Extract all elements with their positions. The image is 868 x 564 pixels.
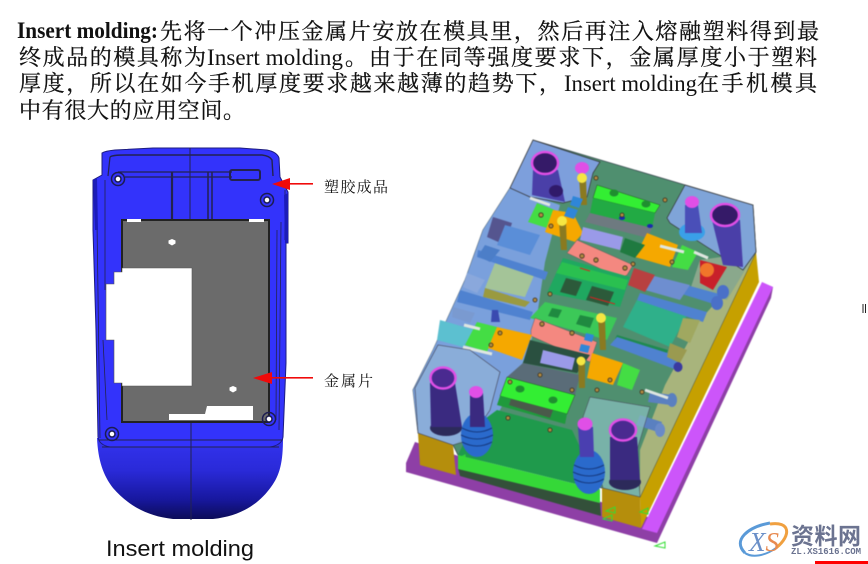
- watermark logo: [740, 523, 861, 557]
- pale right-side block: [690, 252, 756, 300]
- intro text block: 由于在同等强度要求下，金属厚度小于塑料: [369, 45, 817, 71]
- pink plate upper: [567, 240, 633, 278]
- housing detail lines: [97, 148, 285, 520]
- inserts, lower: [465, 322, 640, 395]
- intro text block: Insert molding: [564, 71, 697, 96]
- center green cavity: [530, 258, 630, 340]
- plate top tabs: [127, 219, 264, 222]
- plate holes: [168, 239, 236, 392]
- pin back right: [679, 196, 705, 241]
- heading term: Insert molding:: [17, 18, 158, 43]
- lower green core: [458, 410, 600, 490]
- red axis marks: [580, 268, 615, 304]
- intro text block: [17, 18, 819, 123]
- intro text block: 。: [345, 45, 367, 70]
- back left block: [510, 140, 600, 203]
- intro text block: 在手机模具: [697, 71, 818, 96]
- edge mark: [863, 304, 866, 313]
- top green block: [585, 185, 660, 238]
- mold 3D assembly: [406, 140, 773, 548]
- metal insert plate: [122, 220, 269, 422]
- spring pin front left: [461, 386, 493, 457]
- caption: Insert molding: [106, 536, 254, 561]
- guide pillar back left: [532, 152, 565, 202]
- yellow support side: [640, 252, 759, 528]
- intro text block: 厚度，所以在如今手机厚度要求越来越薄的趋势下，: [19, 71, 561, 97]
- phone housing diagram: [93, 148, 288, 520]
- green datum marks: [459, 455, 665, 548]
- label: plastic part: 塑胶成品: [324, 179, 388, 196]
- pin back left: [575, 162, 589, 174]
- side grip darker strips: [93, 178, 288, 243]
- arrow: plastic part: [272, 178, 313, 190]
- right side rails: [610, 275, 729, 437]
- label: metal plate: 金属片: [324, 372, 373, 390]
- pink plate lower: [531, 318, 597, 362]
- white slide bars: [463, 198, 708, 398]
- guide pillar back right: [711, 204, 743, 267]
- left zone tint: [413, 188, 560, 445]
- intro text block: 终成品的模具称为: [19, 45, 206, 70]
- dark under-strip: [458, 468, 601, 516]
- front right translucent block: [583, 397, 650, 497]
- arrow: metal plate: [253, 372, 313, 384]
- red bar bottom edge: [815, 561, 868, 564]
- plate cut-out window: [106, 268, 192, 386]
- back right block: [667, 185, 756, 270]
- plate bottom notch: [169, 406, 253, 420]
- logo chinese name: 资料网: [791, 523, 861, 549]
- logo swoosh: [740, 523, 787, 556]
- guide pillar front right: [609, 420, 641, 490]
- small blue blocks: [564, 196, 594, 353]
- left side rails and steps: [437, 217, 548, 347]
- intro text block: 中有很大的应用空间。: [19, 98, 245, 123]
- bottom green block: [497, 377, 575, 424]
- mold body translucent: [413, 140, 756, 497]
- guide pillar front left: [430, 368, 462, 436]
- front left translucent block: [415, 345, 500, 445]
- green and orange inserts, upper: [528, 203, 727, 292]
- intro text block: 先将一个冲压金属片安放在模具里，然后再注入熔融塑料得到最: [160, 19, 819, 45]
- yellow ejector pins: [557, 173, 606, 388]
- right zone olive: [640, 252, 756, 497]
- assembly screws: [489, 176, 674, 432]
- purple base plate: [406, 282, 773, 543]
- yellow front block right: [602, 488, 641, 528]
- yellow front block left: [418, 433, 456, 475]
- spring pin front right: [573, 418, 605, 494]
- logo url: ZL.XS1616.COM: [791, 547, 861, 557]
- logo letters: XS: [748, 527, 780, 557]
- plastic body: [93, 148, 288, 447]
- bottom rounded chin: [97, 438, 283, 519]
- intro text block: Insert molding: [207, 45, 343, 70]
- screw bosses: [106, 172, 276, 440]
- bright green strip: [458, 455, 600, 503]
